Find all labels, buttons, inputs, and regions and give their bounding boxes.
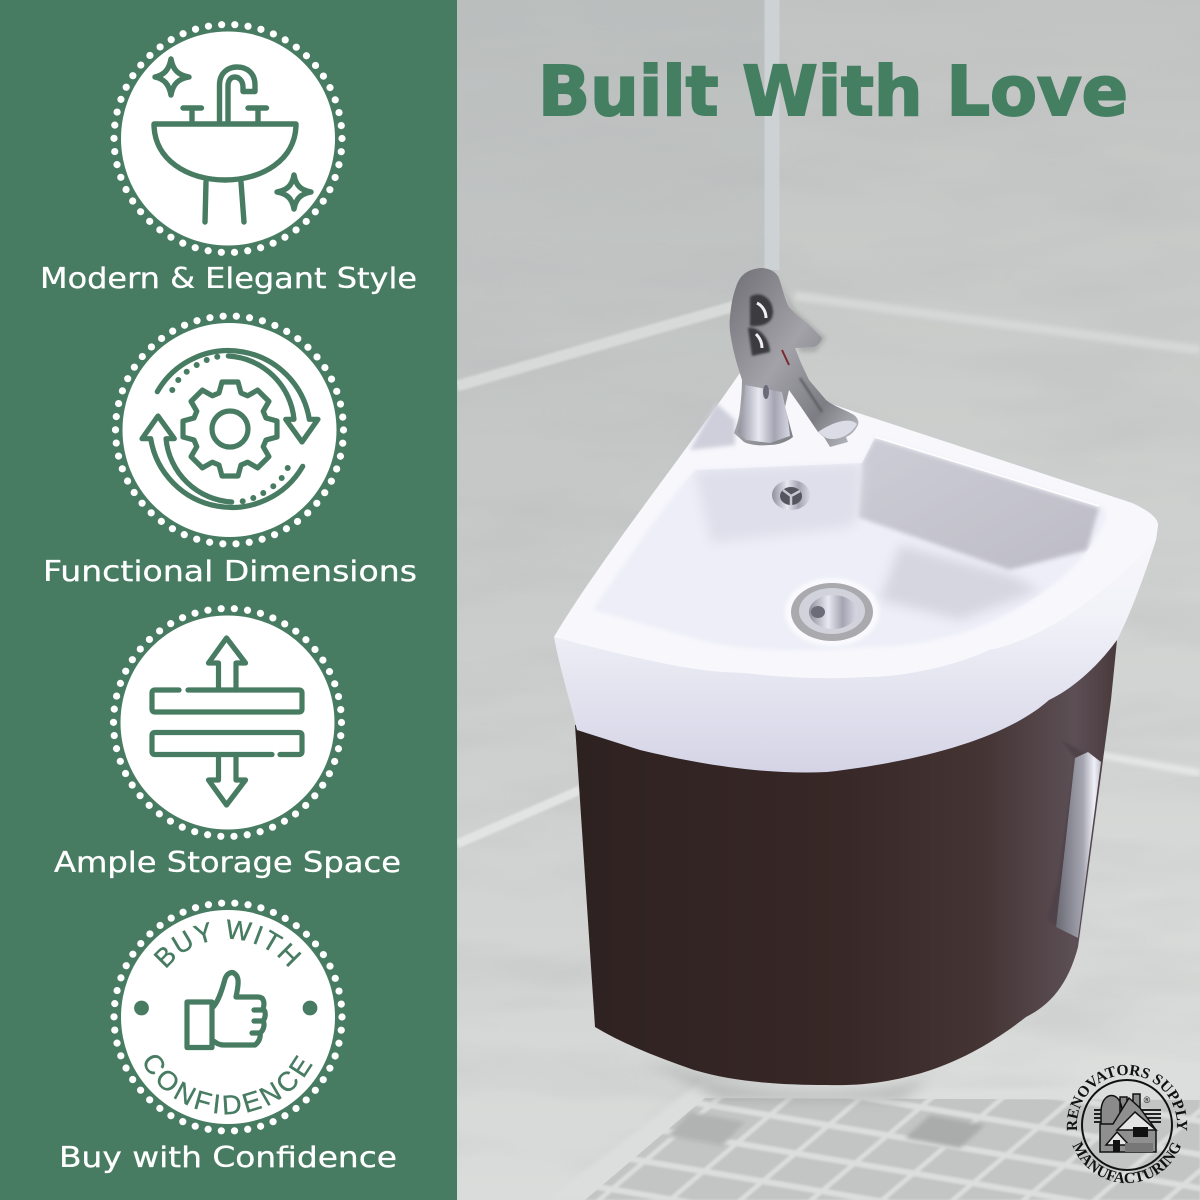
curved text: buy with: BUY WITH	[153, 919, 302, 968]
faucet base highlight	[738, 385, 790, 443]
faucet wall shadow	[778, 278, 826, 352]
label: Ample Storage Space	[54, 846, 401, 879]
side dots	[134, 1001, 317, 1015]
logo text top: RENOVATORS SUPPLY	[1066, 1064, 1188, 1131]
feature 3: ample storage space	[54, 608, 401, 879]
faucet shadow	[690, 403, 735, 450]
vanity cabinet	[575, 630, 1118, 1100]
curved text: confidence: CONFIDENCE	[144, 1054, 313, 1115]
icon: thumbs up	[187, 973, 265, 1048]
green left panel	[0, 0, 457, 1200]
dotted badge ring	[114, 24, 342, 252]
corner sink	[554, 268, 1158, 772]
sink top surface	[554, 373, 1158, 678]
registered mark: ®	[1144, 1095, 1151, 1105]
icon: sink with sparkles	[154, 59, 311, 222]
faucet lever details	[748, 294, 773, 356]
feature 2: functional dimensions	[43, 316, 417, 588]
white badge	[121, 32, 335, 246]
logo text bottom: MANUFACTURING	[1072, 1140, 1181, 1184]
overflow hole	[772, 480, 810, 510]
title: Built With Love	[538, 52, 1128, 132]
feature 4: buy with confidence	[59, 900, 397, 1174]
dotted badge ring	[114, 903, 342, 1131]
dotted badge ring	[114, 608, 342, 836]
label: Functional Dimensions	[43, 555, 417, 588]
label: Modern & Elegant Style	[40, 262, 417, 295]
logo: Renovators Supply Manufacturing	[1066, 1064, 1188, 1184]
feature 1: modern and elegant style	[40, 24, 417, 295]
basin	[593, 437, 1106, 650]
floor: mosaic tiles	[540, 1080, 1200, 1200]
label: Buy with Confidence	[59, 1141, 397, 1174]
white badge	[121, 910, 335, 1124]
cabinet shadow	[610, 1040, 930, 1100]
white badge	[122, 323, 336, 537]
logo ring	[1082, 1080, 1172, 1170]
cabinet body	[575, 630, 1118, 1085]
icon: shelves with expanding arrows	[152, 638, 302, 805]
sink outer body	[554, 373, 1158, 772]
logo house	[1094, 1094, 1161, 1152]
faucet	[690, 268, 858, 450]
faucet body outline	[730, 268, 858, 447]
photo background: tiled shower walls	[457, 0, 1200, 1200]
white badge	[120, 616, 334, 830]
icon: gear with circular arrows	[142, 351, 318, 507]
drain	[785, 578, 879, 646]
dotted badge ring	[116, 316, 344, 544]
cabinet door handle	[1047, 740, 1101, 938]
